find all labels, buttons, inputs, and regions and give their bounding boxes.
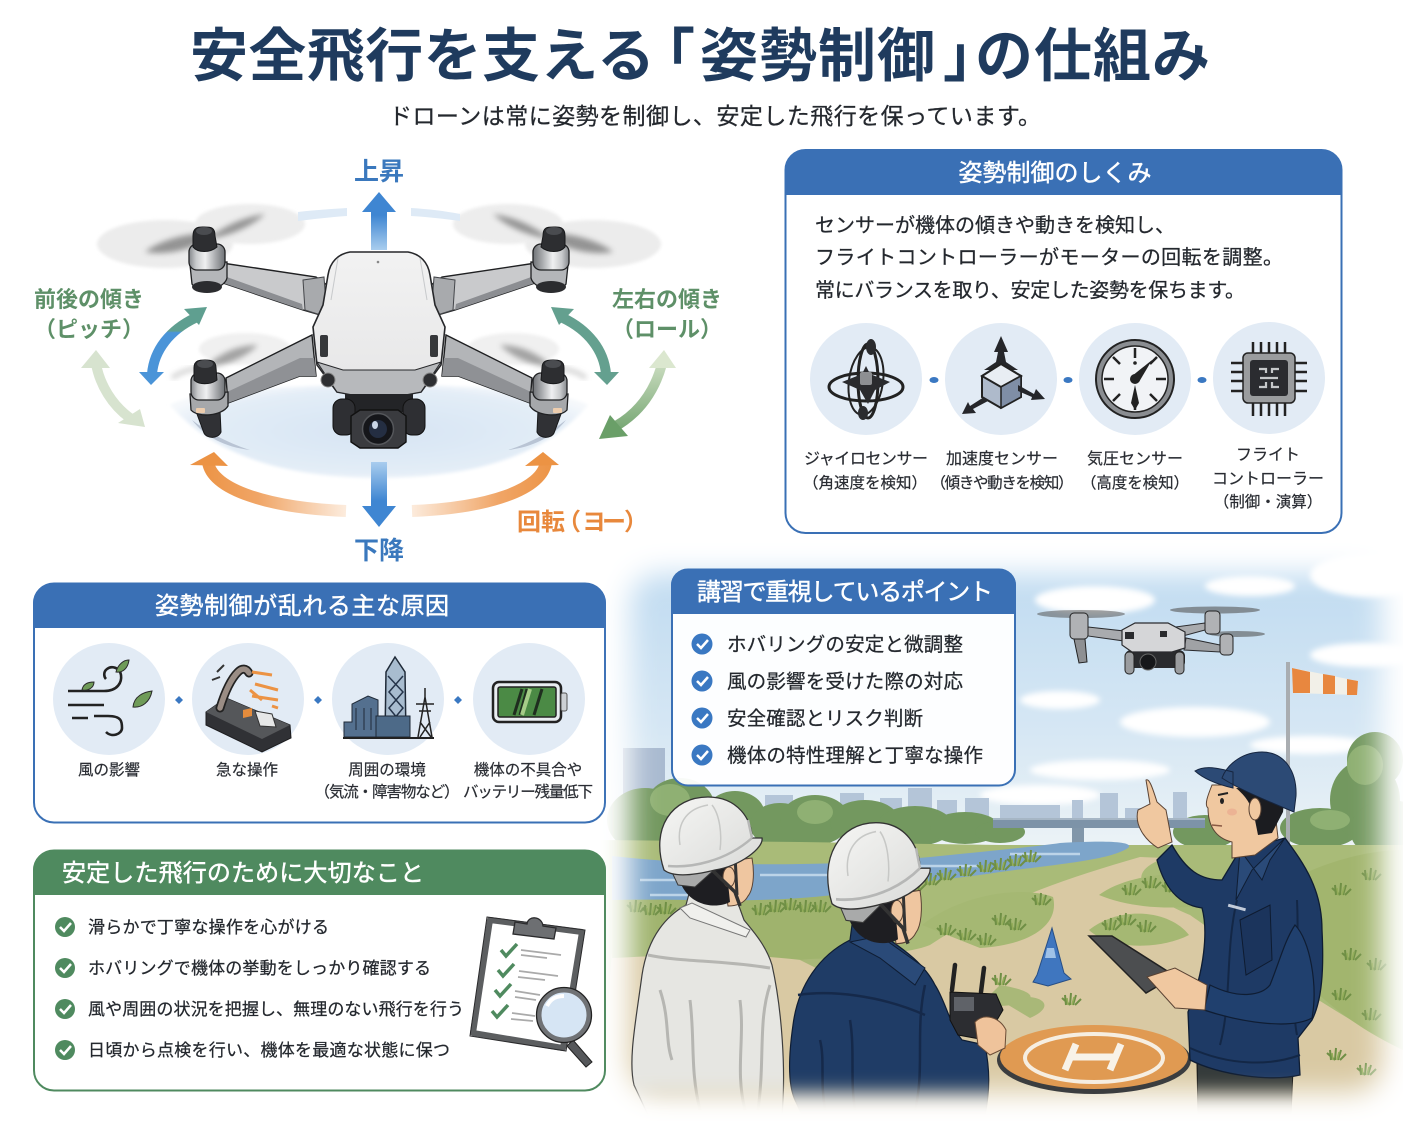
gimbal camera bbox=[333, 394, 425, 448]
arrow: pitch outer bbox=[81, 350, 145, 427]
check list: 風や周囲の状況を把握し、無理のない飛行を行う bbox=[88, 1000, 464, 1019]
label: pitch: 前後の傾き bbox=[34, 287, 144, 312]
drone attitude diagram bbox=[34, 158, 722, 565]
label: yaw: 回転 bbox=[517, 509, 565, 536]
pale top arcs bbox=[298, 208, 460, 221]
arrow: up bbox=[362, 192, 396, 250]
jacket bbox=[1157, 838, 1323, 1078]
icon: surroundings bbox=[332, 643, 444, 755]
rotor blur: top-left bbox=[97, 204, 305, 268]
sensor labels: （制御・演算） bbox=[1214, 492, 1322, 511]
cause labels bbox=[78, 761, 593, 801]
title: の仕組み bbox=[975, 24, 1210, 89]
panel: causes of attitude disturbance bbox=[33, 583, 606, 822]
icon: barometer bbox=[1079, 323, 1191, 435]
tablet bbox=[1089, 936, 1175, 993]
label: descend: 下降 bbox=[354, 537, 404, 565]
cone bbox=[1033, 928, 1071, 986]
pointing hand bbox=[1137, 780, 1172, 848]
grass tufts bbox=[627, 850, 1386, 1075]
title: 姿勢制御 bbox=[700, 24, 935, 89]
icon: flight controller chip bbox=[1213, 322, 1325, 434]
sensor labels: フライト bbox=[1236, 447, 1300, 464]
label: yaw: ） bbox=[624, 509, 648, 536]
person: middle trainee with controller bbox=[789, 823, 1006, 1115]
explanation text bbox=[815, 214, 1283, 302]
arrow: roll inner bbox=[551, 307, 619, 385]
panel header bbox=[785, 150, 1342, 195]
illustration: training scene at riverside bbox=[600, 540, 1403, 1121]
panel heading: 安定した飛行のために大切なこと bbox=[62, 860, 424, 887]
bridge bbox=[993, 818, 1205, 845]
label: yaw: （ bbox=[557, 509, 581, 536]
panel heading: 講習で重視しているポイント bbox=[697, 579, 993, 606]
icon: clipboard with magnifier bbox=[470, 917, 592, 1067]
pants bbox=[1197, 1063, 1293, 1115]
check list: 日頃から点検を行い、機体を最適な状態に保つ bbox=[88, 1041, 450, 1060]
panel header bbox=[33, 583, 606, 628]
face details bbox=[1212, 793, 1237, 826]
title bbox=[190, 24, 1210, 89]
title: 安全飛行を支える bbox=[190, 24, 655, 89]
arrow: yaw right bbox=[412, 452, 559, 511]
explanation text: 常にバランスを取り、安定した姿勢を保ちます。 bbox=[815, 279, 1245, 302]
label: pitch: （ピッチ） bbox=[34, 317, 144, 342]
label: ascend: 上昇 bbox=[354, 158, 404, 186]
ground shadow marks bbox=[192, 420, 566, 450]
check list: ホバリングで機体の挙動をしっかり確認する bbox=[88, 959, 431, 978]
scene background bbox=[600, 540, 1403, 1121]
icon: accelerometer bbox=[945, 323, 1057, 435]
sensor labels: （高度を検知） bbox=[1081, 474, 1189, 492]
label: roll: （ロール） bbox=[612, 317, 722, 342]
head bbox=[1206, 785, 1278, 858]
panel header bbox=[671, 569, 1016, 614]
cause labels: 風の影響 bbox=[78, 761, 140, 779]
subtitle: ドローンは常に姿勢を制御し、安定した飛行を保っています。 bbox=[389, 103, 1041, 129]
icon: wind bbox=[53, 643, 165, 755]
far city bbox=[623, 748, 1187, 818]
panel header bbox=[33, 850, 606, 895]
icon: gyro sensor bbox=[810, 323, 922, 435]
person: left trainee bbox=[632, 797, 784, 1115]
cause labels: 急な操作 bbox=[216, 761, 278, 779]
controller bbox=[950, 965, 1003, 1040]
explanation text: フライトコントローラーがモーターの回転を調整。 bbox=[815, 246, 1283, 269]
windsock bbox=[1288, 662, 1358, 850]
hand bbox=[975, 1017, 1006, 1055]
cause labels: 機体の不具合や bbox=[474, 761, 582, 779]
connector dots bbox=[930, 377, 1206, 383]
sensor labels: 加速度センサー bbox=[946, 450, 1058, 468]
rotor blur: bottom bbox=[172, 333, 586, 378]
sleeve holding tablet bbox=[1204, 925, 1314, 1024]
label: roll: 左右の傾き bbox=[612, 287, 722, 312]
arrow: down bbox=[362, 462, 396, 527]
check list: 安全確認とリスク判断 bbox=[727, 708, 923, 730]
cause labels: 周囲の環境 bbox=[348, 761, 426, 779]
label: pitch bbox=[34, 287, 144, 342]
check list bbox=[55, 917, 464, 1060]
rotor blur: top-right bbox=[453, 204, 661, 268]
explanation text: センサーが機体の傾きや動きを検知し、 bbox=[815, 214, 1175, 237]
sand path and ground bbox=[600, 857, 1403, 1121]
check list: 風の影響を受けた際の対応 bbox=[727, 671, 963, 693]
sensor labels: コントローラー bbox=[1212, 471, 1324, 488]
sensor labels: 気圧センサー bbox=[1087, 450, 1183, 468]
check list: ホバリングの安定と微調整 bbox=[727, 634, 963, 656]
grass base bbox=[610, 840, 1396, 1022]
flying drone bbox=[1037, 606, 1265, 674]
river bbox=[612, 842, 1129, 905]
sensor labels bbox=[803, 447, 1324, 511]
hand holding tablet bbox=[1147, 968, 1207, 1010]
sensor labels: （傾きや動きを検知） bbox=[930, 474, 1074, 492]
panel heading: 姿勢制御が乱れる主な原因 bbox=[155, 593, 449, 620]
panel: how attitude control works bbox=[785, 150, 1342, 533]
people bbox=[632, 752, 1323, 1115]
connector dots bbox=[175, 696, 462, 704]
arrow: roll outer bbox=[599, 350, 676, 439]
clouds bbox=[980, 553, 1403, 805]
cap bbox=[1195, 752, 1296, 812]
label: yaw: ヨー bbox=[582, 509, 626, 536]
check list: 滑らかで丁寧な操作を心がける bbox=[88, 918, 329, 937]
landing pad bbox=[997, 1025, 1191, 1094]
label: roll bbox=[612, 287, 722, 342]
icon: sudden operation bbox=[192, 643, 304, 755]
check list: 機体の特性理解と丁寧な操作 bbox=[727, 745, 983, 767]
far trees bbox=[608, 732, 1403, 845]
title: 「 bbox=[637, 24, 695, 89]
panel: important for stable flight bbox=[33, 850, 606, 1090]
person: right instructor bbox=[1089, 752, 1323, 1115]
panel heading: 姿勢制御のしくみ bbox=[959, 160, 1151, 187]
drone body bbox=[189, 227, 569, 437]
cause labels: バッテリー残量低下 bbox=[463, 783, 593, 801]
sensor labels: ジャイロセンサー bbox=[804, 451, 928, 468]
ground shadow ellipse bbox=[170, 385, 588, 478]
label: yaw bbox=[517, 509, 648, 536]
cause labels: （気流・障害物など） bbox=[314, 783, 460, 801]
title: 」 bbox=[943, 24, 1001, 89]
check list bbox=[692, 634, 983, 767]
sensor labels: （角速度を検知） bbox=[803, 474, 927, 492]
panel: training focus points bbox=[671, 569, 1016, 786]
arrow: yaw left bbox=[190, 452, 346, 511]
arrow: pitch inner bbox=[139, 307, 207, 385]
icon: battery bbox=[473, 643, 585, 755]
